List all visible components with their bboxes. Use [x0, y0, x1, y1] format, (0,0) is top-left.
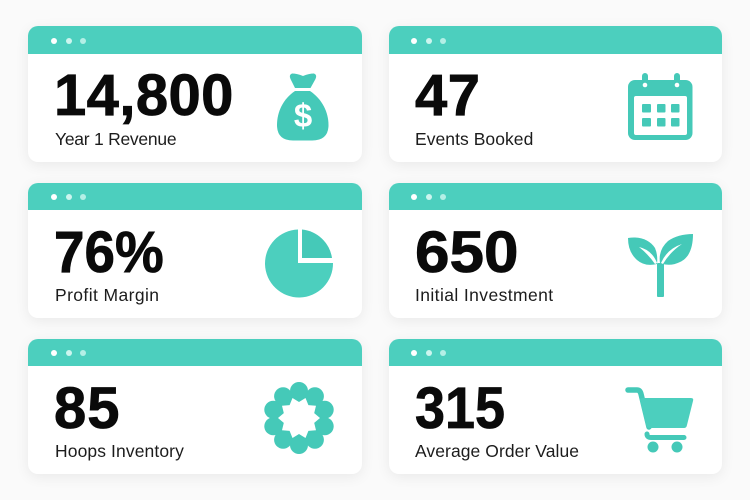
- panel: hoops inventory: [28, 339, 362, 474]
- label: hoops inventory: Hoops Inventory: [55, 441, 184, 461]
- value: 47: 47: [415, 63, 481, 128]
- icon: money bag: $: [294, 97, 312, 134]
- icon: calendar: [628, 73, 692, 140]
- label: average order value: Average Order Value: [415, 441, 579, 461]
- label: year 1 revenue: Year 1 Revenue: [55, 129, 176, 149]
- label: events booked: Events Booked: [415, 129, 533, 149]
- panel: profit margin: [28, 183, 362, 318]
- panel: events booked: [389, 26, 722, 162]
- icon: sprout: [628, 234, 693, 297]
- header bar: [28, 183, 362, 210]
- icon: money bag: [277, 74, 328, 140]
- header bar: [389, 183, 722, 210]
- label: initial investment: Initial Investment: [415, 285, 554, 305]
- value: 315: 315: [415, 376, 505, 441]
- icon: shopping cart: [625, 387, 694, 452]
- value: 76%: 76%: [54, 220, 164, 285]
- label: profit margin: Profit Margin: [55, 285, 159, 305]
- header bar: [28, 26, 362, 54]
- value: 14,800: 14,800: [54, 63, 234, 128]
- header bar: [28, 339, 362, 366]
- header bar: [389, 26, 722, 54]
- header bar: [389, 339, 722, 366]
- value: 650: 650: [415, 220, 519, 285]
- panel: initial investment: [389, 183, 722, 318]
- icon: ring of hoops: [264, 382, 334, 454]
- panel: average order value: [389, 339, 722, 474]
- value: 85: 85: [54, 376, 121, 441]
- panel: year 1 revenue: [28, 26, 362, 162]
- icon: pie chart: [265, 230, 333, 298]
